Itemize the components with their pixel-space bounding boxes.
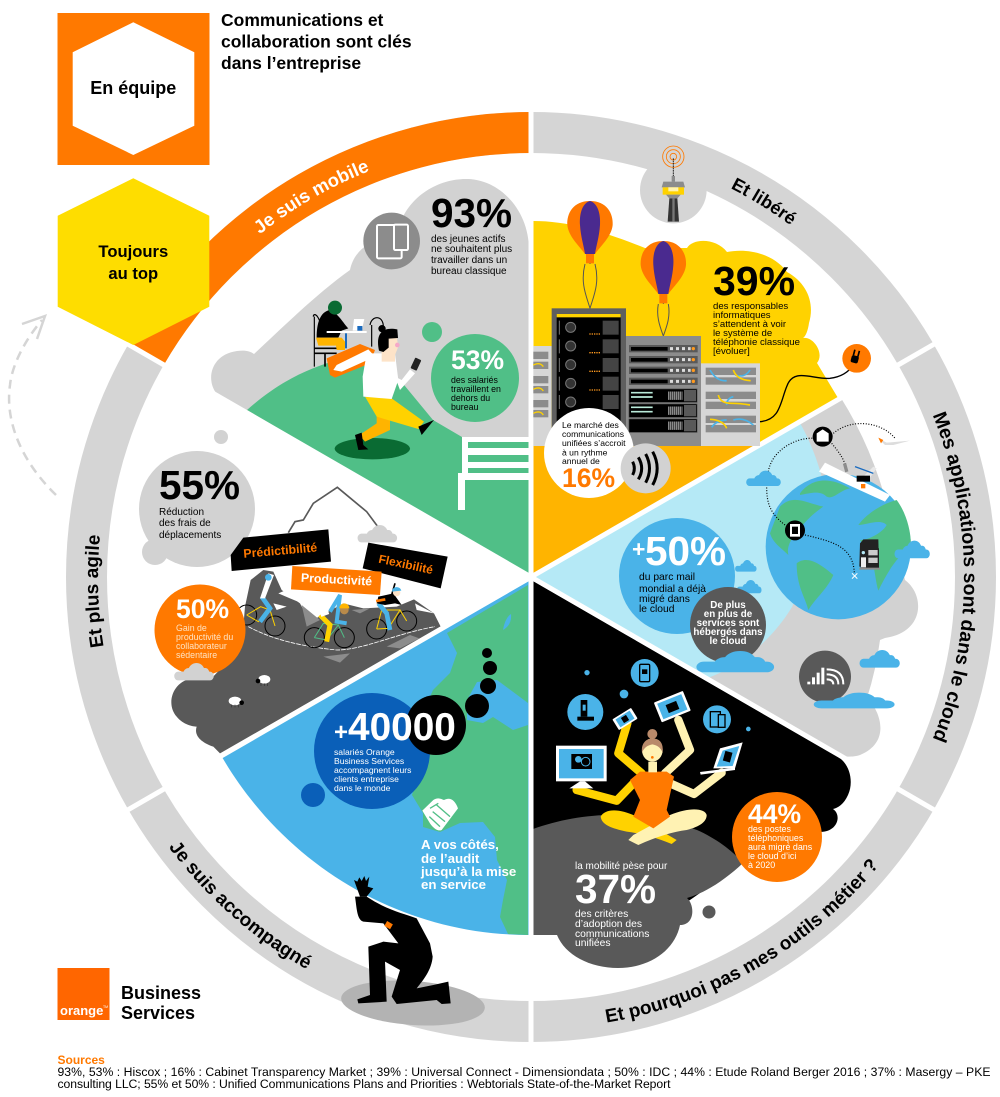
stat: 53%: travaillent en [451, 384, 501, 394]
yellow hexagon: au top [108, 264, 158, 283]
stat: 39%: informatiques [713, 310, 771, 321]
stat: +50%: le cloud [639, 604, 675, 615]
panel: Et libéré [533, 221, 838, 577]
stat: 53%: dehors du [451, 393, 490, 403]
stat: 39%: [évoluer] [713, 346, 750, 357]
black rack [552, 308, 626, 446]
stat: +40000: accompagnent leurs [334, 765, 411, 775]
stat: 93%: 93% [431, 190, 512, 236]
panel: Je suis accompagné [222, 581, 529, 935]
sources: 93%, 53% : Hiscox ; 16% : Cabinet Transparency Market ; 39% : Universal Connect - Dimensiondata ; 50% : IDC ; 44% : Etude Roland Berger 2016 ; 37% : Masergy – PKE [58, 1065, 990, 1079]
stat: +40000: Business Services [334, 756, 404, 766]
runner [327, 325, 434, 450]
continents [770, 480, 911, 610]
callout: services hébergés dans le cloud [690, 587, 774, 672]
stat: 37% [575, 861, 668, 949]
middle rack [626, 336, 701, 446]
head [642, 729, 663, 772]
ground shadow [335, 438, 410, 459]
stat: 44%: des postes [748, 824, 791, 834]
stat: +50%: mondial a déjà [639, 584, 706, 595]
stat: +40000: dans le monde [334, 783, 391, 793]
stat: 44%: 44% [748, 799, 801, 829]
lower shade [533, 446, 760, 577]
stat: 39%: des responsables [713, 301, 788, 312]
stat: 44%: aura migré dans [748, 842, 813, 852]
sheep [229, 675, 270, 707]
light blue area [531, 423, 830, 679]
stat: 39%: téléphonie classique [713, 337, 800, 348]
stat: 39% [713, 258, 800, 357]
sign: Productivité [291, 566, 382, 595]
stat: +40000: 40000 [348, 706, 456, 749]
text: A vos côtés: A vos côtés, [421, 837, 499, 852]
cyclist 3 [367, 583, 417, 639]
globe [766, 474, 911, 619]
stat: 39%: 39% [713, 258, 795, 304]
stat: 55% [139, 430, 255, 567]
icon: tablet and phone [363, 213, 420, 269]
stat: 37%: communications [575, 929, 649, 940]
sign: Flexibilité [363, 543, 448, 588]
dashed arrow [9, 316, 56, 495]
snow [273, 588, 434, 613]
stat: 53%: 53% [451, 345, 504, 375]
stat: +40000: salariés Orange [334, 747, 395, 757]
stat: 93%: bureau classique [431, 266, 507, 277]
illustration: kneeling man [354, 876, 451, 1004]
stat: 55%: Réduction [159, 507, 204, 518]
rocks [302, 605, 419, 663]
icon: handshake [422, 798, 458, 830]
sign: Productivité: Productivité [301, 571, 373, 589]
stat: 55%: déplacements [159, 530, 221, 541]
label: Je suis mobile: Je suis mobile [255, 162, 368, 233]
panel: server illustration [533, 201, 871, 446]
bubbles [301, 648, 497, 809]
gray cloud [531, 398, 918, 757]
gray hill [533, 815, 743, 968]
balloon 2 [641, 241, 686, 336]
callout: services hébergés dans le cloud: le cloud [709, 636, 747, 647]
stat: 37%: d’adoption des [575, 919, 642, 930]
panel: Et pourquoi pas mes outils métier [533, 581, 851, 968]
device bubbles [567, 659, 751, 733]
stat: 50%: Gain de [176, 623, 207, 633]
stat: 50% [154, 584, 246, 676]
logo: Orange Business Services [58, 968, 201, 1023]
callout: services hébergés dans le cloud: services sont [697, 618, 760, 629]
stat: +40000 [301, 648, 497, 809]
label: Et plus agile: Et plus agile [84, 535, 104, 648]
logo: Orange Business Services: TM [103, 1005, 108, 1009]
cyclist 1 [237, 573, 285, 636]
stat: 44% [732, 792, 822, 882]
yellow hexagon [58, 178, 209, 345]
legs [601, 810, 677, 844]
large plane wing [819, 463, 890, 502]
stat: 53% [422, 322, 519, 422]
illustration: café worker and running person [313, 301, 434, 459]
sources: Sources [58, 1053, 105, 1067]
cyclist 2 [304, 595, 354, 648]
title: Communications et [221, 10, 384, 30]
text: A vos côtés: de l’audit [421, 851, 480, 866]
small device glyphs [577, 664, 725, 727]
seated worker [313, 301, 383, 367]
yellow hexagon: Toujours [98, 242, 168, 261]
outer ring [86, 112, 976, 1022]
man shadow [340, 976, 486, 1030]
panel: Je suis mobile [211, 179, 531, 577]
yellow cloud [533, 221, 838, 577]
stat: 37%: unifiées [575, 938, 610, 949]
logo: Orange Business Services: orange [60, 1003, 103, 1018]
stat: 44%: à 2020 [748, 860, 775, 870]
icon: film [785, 520, 805, 540]
sign: Prédictibilité [231, 529, 331, 571]
stat: 16%: 16% [562, 463, 615, 493]
stat: 53%: bureau [451, 402, 478, 412]
stat: 53%: des salariés [451, 375, 499, 385]
stat: 93%: travailler dans un [431, 255, 507, 266]
stat: 44%: téléphoniques [748, 833, 804, 843]
stat: 37%: la mobilité pèse pour [575, 861, 668, 872]
panel: globe illustration [735, 424, 930, 668]
stat: 55%: 55% [159, 462, 240, 508]
sources [58, 1053, 990, 1091]
road [248, 627, 435, 650]
small gray dot [702, 906, 716, 918]
panel: Et plus agile land [171, 487, 441, 753]
stat: 16%: à un rythme [562, 448, 608, 458]
small plane [878, 438, 910, 445]
stat: +40000: + [334, 719, 348, 746]
sources: consulting LLC; 55% et 50% : Unified Communications Plans and Priorities : Webtorials State-of-the-Market Report [58, 1077, 671, 1091]
bench [458, 437, 529, 510]
callout: services hébergés dans le cloud: hébergés dans [693, 627, 763, 638]
stat: 44%: le cloud d’ici [748, 851, 796, 861]
right rack [701, 363, 760, 446]
illustration: cyclists [231, 525, 448, 648]
title: collaboration sont clés [221, 32, 412, 52]
balloon 1 [567, 201, 613, 308]
stat: +50% [619, 518, 735, 634]
laptop [700, 742, 743, 775]
stat: 16%: communications [562, 429, 624, 439]
text: A vos côtés: jusqu’à la mise [420, 864, 516, 879]
label: Et pourquoi pas: Et pourquoi pas mes outils métier ? [605, 859, 876, 1022]
left light rack [533, 346, 552, 446]
icon: network signal [799, 651, 895, 708]
logo: Orange Business Services: Business [121, 983, 201, 1003]
logo: Orange Business Services: Services [121, 1003, 195, 1023]
stat: 50%: sédentaire [176, 650, 217, 660]
label: Mes applications: Mes applications sont dans le cloud [933, 411, 976, 743]
stat: 39%: s’attendent à voir [713, 319, 787, 330]
icon: plug [842, 344, 871, 373]
stat: 16%: annuel de [562, 456, 600, 466]
gray background [211, 179, 531, 577]
ring labels [84, 162, 976, 1022]
stat: 39%: le système de [713, 328, 772, 339]
stat: 16%: Le marché des [562, 420, 619, 430]
stat: 37%: des critères [575, 909, 628, 920]
clouds [735, 471, 930, 668]
mountain outline [288, 487, 378, 533]
green hill [247, 358, 531, 577]
slice separators [119, 100, 943, 1054]
gray cloud [358, 525, 397, 542]
dark land [171, 570, 441, 753]
title: dans l’entreprise [221, 53, 361, 73]
blue sector [222, 581, 529, 935]
stat: 50%: productivité du [176, 632, 233, 642]
sign: Prédictibilité: Prédictibilité [243, 540, 318, 561]
ring segment: Je suis mobile [128, 112, 531, 365]
stat: +50%: 50% [645, 528, 726, 574]
label: Et libéré: Et libéré [732, 178, 797, 224]
orange square with hexagon [58, 13, 210, 165]
label: Je suis accompagné: Je suis accompagné [170, 842, 312, 968]
callout: services hébergés dans le cloud: en plus de [704, 609, 753, 620]
stat: 93%: des jeunes actifs [431, 234, 506, 245]
monitor [556, 746, 607, 788]
stat: +50%: du parc mail [639, 572, 695, 583]
stat: 16%: unifiées s’accroit [562, 438, 626, 448]
lake [467, 680, 528, 730]
dress [630, 772, 674, 828]
stat: 50%: collaborateur [176, 641, 227, 651]
arms [577, 720, 722, 801]
gray cloud below 50% [174, 663, 214, 680]
stat: 50%: 50% [176, 594, 229, 624]
cable [760, 365, 853, 422]
text: A vos côtés: en service [421, 877, 486, 892]
tablet [654, 691, 691, 722]
stat: +40000: clients entreprise [334, 774, 399, 784]
cross marker [852, 573, 857, 579]
stat: 93% [431, 190, 512, 277]
sign: Flexibilité: Flexibilité [377, 552, 435, 577]
stat: 37%: 37% [575, 866, 656, 912]
icon: building [859, 539, 880, 570]
panel: Mes applications sont dans le cloud [531, 398, 918, 757]
stat: +50%: migré dans [639, 594, 690, 605]
small lake [503, 614, 511, 630]
stat: 16% [544, 408, 671, 498]
orange square with hexagon: En équipe [90, 78, 176, 98]
phone [612, 708, 638, 730]
callout: services hébergés dans le cloud: De plus [710, 600, 746, 611]
icon: contactless waves [621, 443, 671, 493]
black cloud [533, 581, 851, 935]
icon: mail [813, 427, 833, 447]
stat: 55%: des frais de [159, 518, 211, 529]
green land [412, 585, 528, 935]
flight paths [767, 424, 895, 573]
illustration: multi-armed woman with devices [556, 659, 751, 845]
stat: 93%: ne souhaitent plus [431, 244, 512, 255]
stat: +50%: + [632, 536, 645, 562]
icon: radio tower [640, 146, 707, 223]
